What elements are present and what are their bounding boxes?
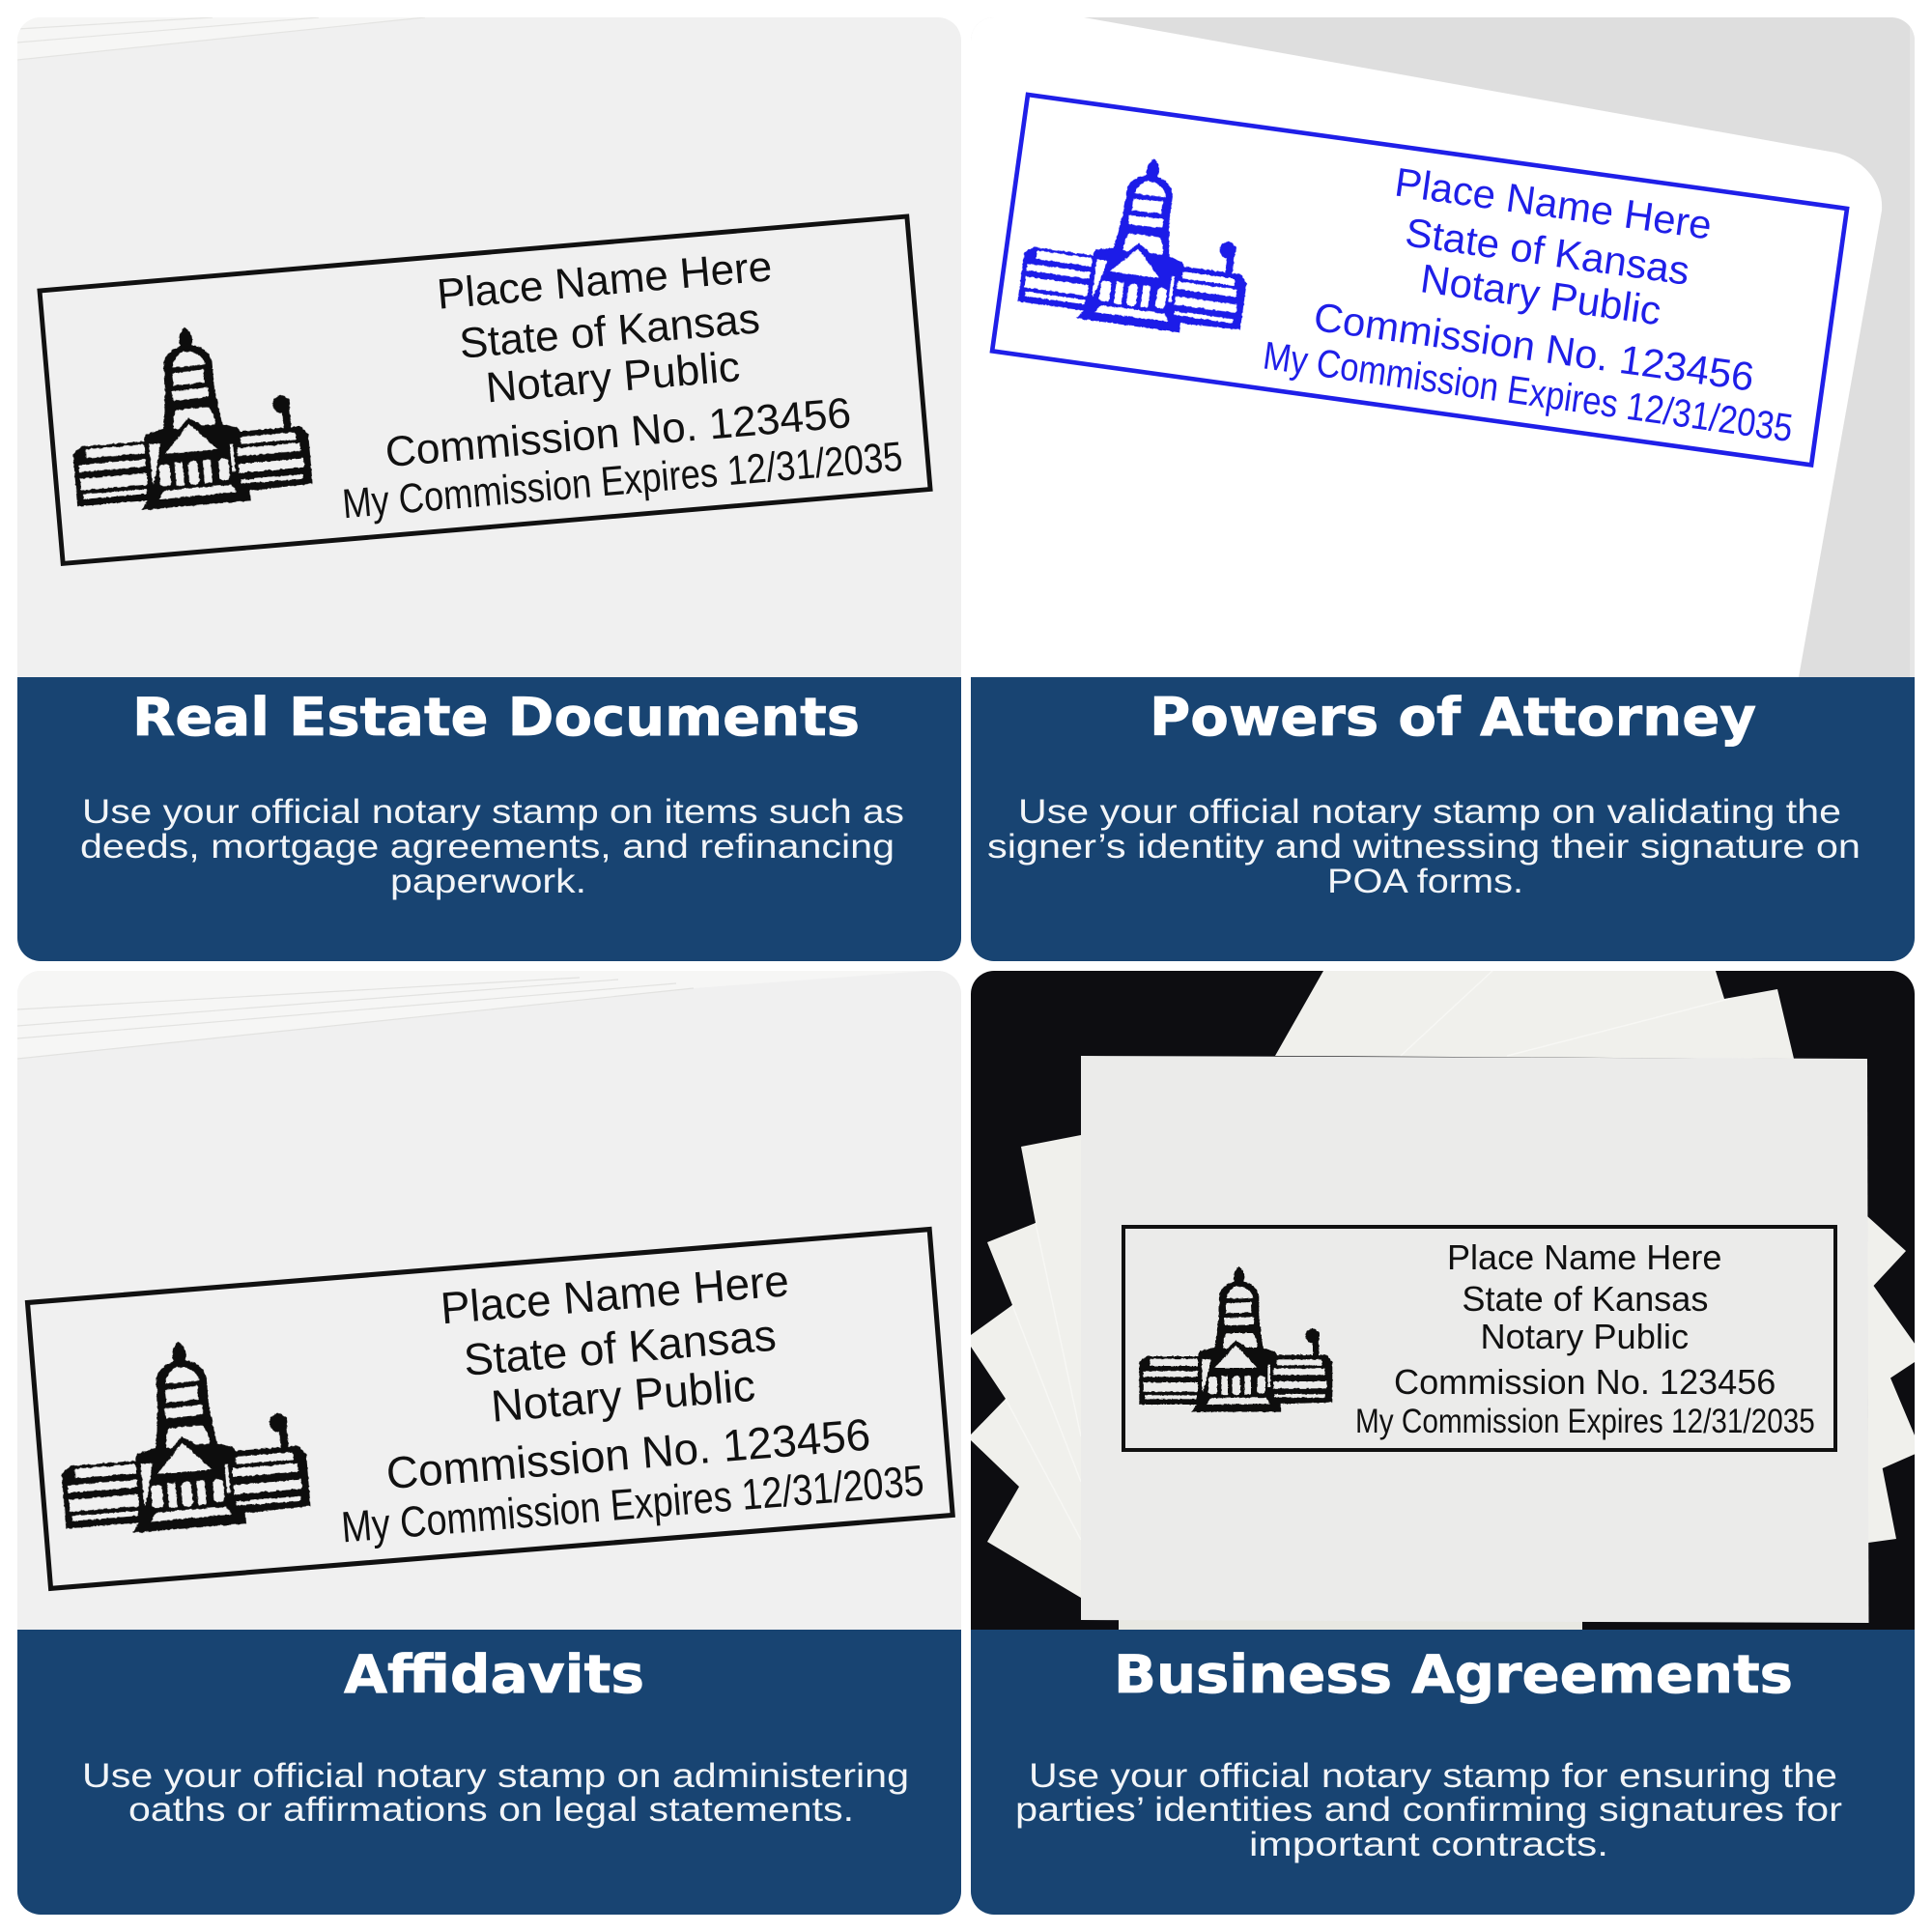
body text: Use your official notary stamp on administering xyxy=(82,1757,909,1795)
stamp text: Place Name Here xyxy=(1392,159,1715,248)
heading: Affidavits xyxy=(344,1644,644,1705)
body text: Use your official notary stamp for ensuring the xyxy=(1029,1757,1837,1795)
stamp text: Commission No. 123456 xyxy=(384,389,853,476)
body text xyxy=(988,798,1859,893)
stamp text: My Commission Expires 12/31/2035 xyxy=(1261,333,1796,450)
stamp text xyxy=(1264,168,1792,440)
stamp text: Notary Public xyxy=(1480,1317,1689,1356)
stamp text xyxy=(1355,1237,1815,1440)
stamp impression xyxy=(27,1230,952,1588)
caption band xyxy=(17,1630,961,1915)
heading: Real Estate Documents xyxy=(132,687,860,748)
caption band xyxy=(971,1630,1915,1915)
body text: POA forms. xyxy=(1327,863,1523,900)
panel: affidavits xyxy=(17,971,961,1915)
body text: Use your official notary stamp on items such as xyxy=(82,793,904,831)
stamp text: My Commission Expires 12/31/2035 xyxy=(1355,1403,1815,1440)
stamp text: State of Kansas xyxy=(458,295,761,368)
photo: fanned white sheets on black xyxy=(971,971,1918,1630)
stamp impression xyxy=(1123,1227,1835,1450)
body text: parties’ identities and confirming signatures for xyxy=(1015,1791,1842,1829)
stamp impression xyxy=(992,95,1847,465)
panel: real estate documents xyxy=(17,17,961,961)
stamp text: Place Name Here xyxy=(435,242,774,319)
heading: Powers of Attorney xyxy=(1150,687,1756,748)
stamp text: Notary Public xyxy=(489,1359,757,1432)
panel: business agreements xyxy=(971,971,1918,1915)
icon: capitol building xyxy=(71,327,313,510)
caption band xyxy=(971,677,1915,961)
photo: stamped white paper xyxy=(17,971,961,1630)
icon: capitol building xyxy=(61,1341,311,1534)
icon: capitol building xyxy=(1139,1266,1332,1412)
heading: Business Agreements xyxy=(1114,1644,1793,1705)
body text: paperwork. xyxy=(390,863,586,900)
stamp text: My Commission Expires 12/31/2035 xyxy=(340,434,904,527)
panel: powers of attorney xyxy=(971,17,1915,961)
stamp text: Commission No. 123456 xyxy=(1311,294,1757,400)
stamp impression xyxy=(40,216,930,563)
icon: capitol building xyxy=(1017,158,1248,333)
stamp text xyxy=(344,257,901,524)
body text: Use your official notary stamp on validating the xyxy=(1018,793,1841,831)
stamp text: State of Kansas xyxy=(1462,1279,1708,1319)
stamp text: Notary Public xyxy=(484,343,742,412)
body text: oaths or affirmations on legal statements. xyxy=(128,1791,854,1829)
photo: blue stamp on white card xyxy=(971,17,1915,677)
stamp text: My Commission Expires 12/31/2035 xyxy=(340,1457,925,1552)
stamp text: Place Name Here xyxy=(439,1255,791,1333)
body text: important contracts. xyxy=(1249,1826,1608,1863)
stamp text: Place Name Here xyxy=(1447,1237,1721,1277)
body text xyxy=(1015,1757,1842,1863)
stamp text: Commission No. 123456 xyxy=(384,1408,872,1498)
stamp text: Notary Public xyxy=(1418,255,1663,333)
body text xyxy=(82,1757,909,1829)
stamp text: State of Kansas xyxy=(462,1309,778,1385)
body text: signer’s identity and witnessing their signature on xyxy=(987,828,1861,866)
stamp text: Commission No. 123456 xyxy=(1394,1362,1776,1402)
body text: deeds, mortgage agreements, and refinancing xyxy=(80,828,895,866)
stamp text xyxy=(343,1270,923,1548)
stamp text: State of Kansas xyxy=(1403,209,1692,294)
caption band xyxy=(17,677,961,961)
body text xyxy=(80,793,904,900)
photo: stamped white paper xyxy=(17,17,961,677)
